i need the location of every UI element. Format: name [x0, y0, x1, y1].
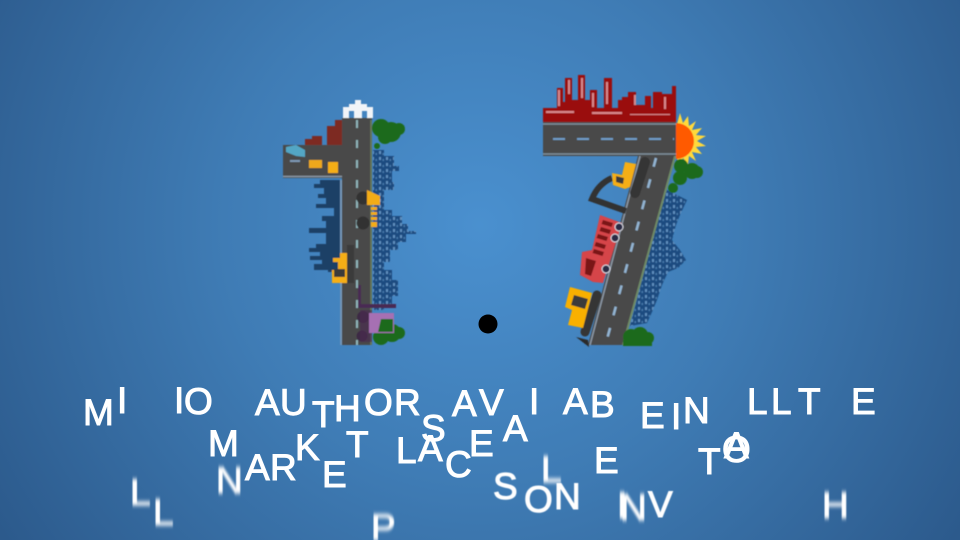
blue truck	[286, 145, 305, 157]
scattered letters: bottom row, motion blurred: H	[822, 485, 849, 526]
scattered letters: top row: L	[747, 381, 768, 422]
scattered letters: top row: H	[334, 388, 361, 429]
top tree	[372, 119, 405, 149]
scattered letters: bottom row, motion blurred: I	[617, 485, 627, 526]
small yellow truck	[328, 162, 338, 173]
scattered letters: middle row: O	[722, 429, 751, 470]
scattered letters: top row: L	[771, 381, 792, 422]
scattered letters: middle row: A	[503, 408, 528, 449]
scattered letters: bottom row, motion blurred: V	[648, 484, 673, 525]
small yellow digger	[309, 160, 322, 168]
scattered letters: top row: R	[394, 382, 421, 423]
yellow dump truck	[332, 245, 354, 283]
scattered letters: bottom row, motion blurred	[130, 449, 849, 540]
diagonal road dashes	[606, 158, 656, 343]
scattered letters: top row: O	[184, 381, 213, 422]
scattered letters: bottom row, motion blurred: L	[541, 449, 562, 490]
dark red buildings	[305, 120, 342, 145]
left skyline	[309, 180, 340, 272]
scattered letters: bottom row, motion blurred: S	[493, 466, 518, 507]
scattered letters: middle row: A	[418, 428, 443, 469]
scattered letters: top row: N	[683, 390, 710, 431]
red skyline	[543, 75, 676, 122]
scattered letters: top row: I	[174, 380, 184, 421]
gate monument	[343, 100, 373, 118]
scattered letters: top row: I	[117, 380, 127, 421]
sun disk	[676, 123, 694, 159]
scattered letters: bottom row, motion blurred: N	[554, 476, 581, 517]
scattered letters: middle row: K	[295, 427, 320, 468]
right skyline with dome	[373, 150, 416, 310]
scattered letters: middle row	[208, 408, 751, 495]
scattered letters: top row: E	[640, 395, 665, 436]
horizontal arm road	[283, 145, 342, 178]
excavator	[592, 162, 645, 211]
scattered letters: bottom row, motion blurred: N	[620, 487, 647, 528]
roller vehicle	[356, 190, 380, 230]
yellow grader	[565, 287, 597, 347]
scattered letters: top row: V	[479, 382, 504, 423]
scattered letters: middle row: A	[724, 425, 749, 466]
scattered letters: top row: M	[83, 392, 114, 433]
scattered letters: middle row: L	[396, 430, 417, 471]
scattered letters: top row: B	[590, 384, 615, 425]
scattered letters: middle row: E	[594, 440, 619, 481]
digit one built from roads	[283, 100, 416, 345]
diagonal blue skyline	[630, 190, 687, 326]
diagonal road	[588, 156, 675, 345]
vertical road	[342, 118, 372, 345]
scattered letters: top row: A	[563, 381, 588, 422]
scattered letters: middle row: T	[346, 424, 369, 465]
scattered letters: middle row: E	[469, 423, 494, 464]
sun rays	[677, 113, 706, 168]
scattered letters: middle row: E	[322, 454, 347, 495]
scattered letters: bottom row, motion blurred: L	[130, 472, 151, 513]
purple vehicle	[356, 285, 396, 342]
road markings	[283, 120, 371, 345]
decimal point	[478, 314, 498, 334]
horizontal road	[543, 122, 676, 156]
bottom tree	[373, 324, 405, 345]
scattered letters: middle row: A	[245, 447, 270, 488]
scattered letters: top row: U	[280, 382, 307, 423]
scattered letters: top row: T	[312, 394, 335, 435]
scattered letters: middle row: C	[445, 444, 472, 485]
digit seven built from roads	[543, 75, 706, 347]
upper tree	[668, 159, 703, 193]
scattered letters: middle row: T	[698, 441, 721, 482]
scattered letters: middle row: S	[421, 408, 446, 449]
scattered letters: top row: I	[529, 381, 539, 422]
scattered letters: top row: A	[255, 382, 280, 423]
scattered letters: top row: O	[364, 382, 393, 423]
scattered letters: top row: T	[798, 381, 821, 422]
scattered letters: top row	[83, 380, 876, 437]
scattered letters: bottom row, motion blurred: O	[524, 479, 553, 520]
scattered letters: middle row: M	[208, 423, 239, 464]
scattered letters: top row: I	[671, 396, 681, 437]
scattered letters: top row: E	[851, 381, 876, 422]
scattered letters: bottom row, motion blurred: N	[216, 460, 243, 501]
lower tree	[623, 327, 654, 346]
scattered letters: middle row: R	[270, 447, 297, 488]
scattered letters: bottom row, motion blurred: L	[153, 492, 174, 533]
scattered letters: top row: A	[452, 383, 477, 424]
red dump truck	[580, 215, 623, 283]
